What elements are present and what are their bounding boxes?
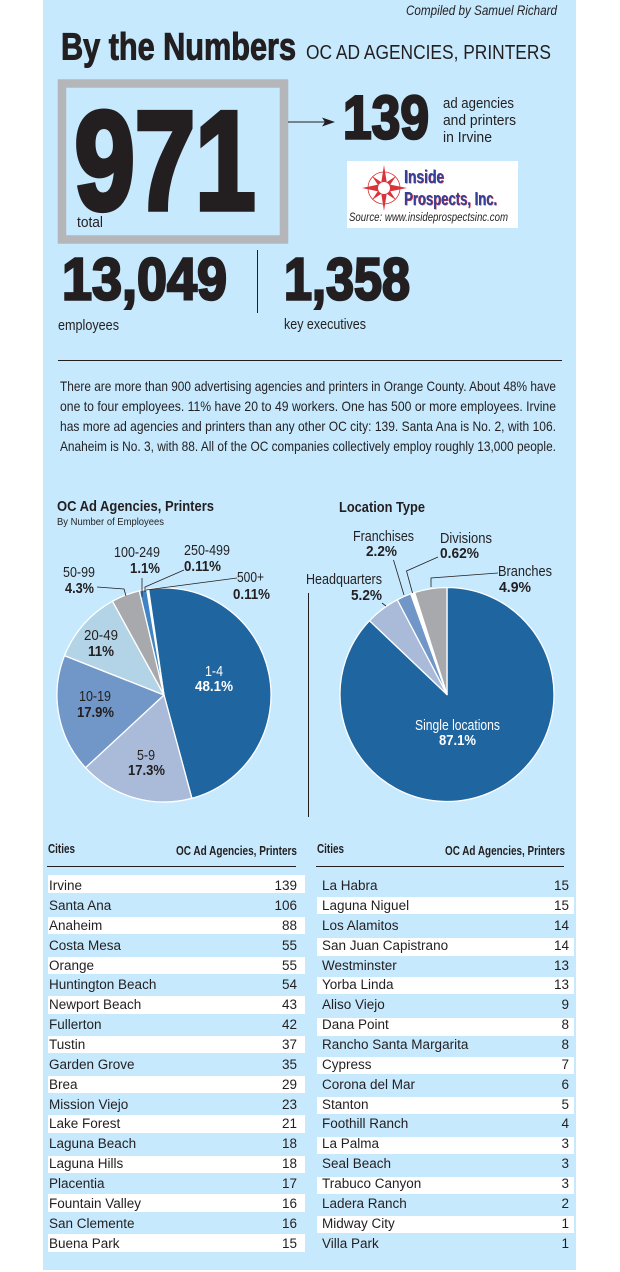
city rows: La Habra	[322, 878, 378, 893]
stat: 971 total: total	[77, 215, 103, 231]
stat: 1,358 key executives: key executives	[284, 317, 366, 333]
city rows: 17	[282, 1176, 297, 1191]
city rows: Westminster	[322, 958, 397, 973]
stat: 139 in Irvine	[343, 84, 516, 152]
city rows: Stanton	[322, 1097, 369, 1112]
stat: 971 total: 971	[74, 82, 256, 239]
slice label: divisions: 0.62%	[440, 546, 479, 562]
city rows: Laguna Hills	[49, 1156, 124, 1171]
city rows: Placentia	[49, 1176, 105, 1191]
city rows: 3	[561, 1136, 569, 1151]
slice label: 20-49: 11%	[88, 644, 114, 660]
city rows: 18	[282, 1136, 297, 1151]
slice label: headquarters: Headquarters	[306, 572, 382, 588]
city rows: 23	[282, 1097, 297, 1112]
city rows: 4	[561, 1116, 569, 1131]
city rows: 14	[554, 918, 569, 933]
slice label: 50-99: 50-99	[63, 565, 95, 581]
city rows: Tustin	[49, 1037, 85, 1052]
slice label: 20-49: 20-49	[84, 628, 118, 644]
slice label: divisions	[440, 531, 492, 562]
city rows: 8	[561, 1017, 569, 1032]
slice label: 250-499: 250-499	[184, 543, 230, 559]
stat: 139 in Irvine: in Irvine	[443, 130, 492, 146]
slice label: 1-4	[195, 664, 233, 695]
city rows	[49, 878, 297, 1251]
city rows: 15	[554, 898, 569, 913]
title: By the Numbers	[61, 26, 296, 68]
pie chart heading: employees: By Number of Employees	[57, 517, 164, 528]
city rows: Trabuco Canyon	[322, 1176, 421, 1191]
city rows: Ladera Ranch	[322, 1196, 407, 1211]
city rows: Aliso Viejo	[322, 997, 385, 1012]
slice label: 1-4: 1-4	[205, 664, 223, 680]
logo: Inside Prospects	[347, 161, 518, 228]
city rows: Irvine	[49, 878, 82, 893]
white row stripes	[317, 897, 574, 1233]
slice label: 5-9	[128, 748, 165, 779]
city rows: 6	[561, 1077, 569, 1092]
city rows: Santa Ana	[49, 898, 112, 913]
pie chart heading: employees	[57, 498, 214, 528]
city rows: 21	[282, 1116, 297, 1131]
city rows: Laguna Niguel	[322, 898, 409, 913]
slice label: 5-9: 5-9	[137, 748, 155, 764]
stat: 139 in Irvine: ad agencies	[443, 96, 514, 112]
city rows: 42	[282, 1017, 297, 1032]
city rows: Dana Point	[322, 1017, 389, 1032]
logo: Inside Prospects: Inside	[404, 166, 444, 187]
table header: OC Ad Agencies, Printers	[445, 844, 565, 858]
city rows: Lake Forest	[49, 1116, 121, 1131]
city rows: 8	[561, 1037, 569, 1052]
icon: compass rose	[362, 165, 407, 211]
table header: Cities	[317, 842, 344, 856]
city rows: Buena Park	[49, 1236, 120, 1251]
city rows: 43	[282, 997, 297, 1012]
leader lines	[382, 557, 498, 606]
stat: 13,049 employees	[58, 246, 227, 334]
slice label: 100-249	[114, 545, 160, 577]
slice label: branches	[498, 564, 552, 596]
city rows: 88	[282, 918, 297, 933]
city rows: Anaheim	[49, 918, 102, 933]
slice label: 10-19: 17.9%	[77, 705, 114, 721]
city rows: 5	[561, 1097, 569, 1112]
table header	[316, 842, 565, 866]
city rows: Huntington Beach	[49, 977, 156, 992]
logo: Inside Prospects: Prospects, Inc.	[404, 188, 497, 209]
city rows: Laguna Beach	[49, 1136, 136, 1151]
slice label: divisions: Divisions	[440, 531, 492, 547]
slice label: 500+: 0.11%	[233, 587, 270, 603]
city rows: Mission Viejo	[49, 1097, 128, 1112]
city rows: 3	[561, 1156, 569, 1171]
city rows: 7	[561, 1057, 569, 1072]
city rows: Yorba Linda	[322, 977, 394, 992]
slice label: 250-499	[184, 543, 230, 575]
subtitle: OC AD AGENCIES, PRINTERS	[306, 42, 551, 64]
city rows: La Palma	[322, 1136, 380, 1151]
city rows: Los Alamitos	[322, 918, 399, 933]
city rows: 55	[282, 958, 297, 973]
slice label: branches: Branches	[498, 564, 552, 580]
slice label: 10-19	[77, 689, 114, 721]
city rows: San Juan Capistrano	[322, 938, 448, 953]
city rows: Fountain Valley	[49, 1196, 141, 1211]
pie chart: location type	[306, 529, 554, 802]
pie chart: by number of employees	[57, 543, 271, 802]
summary paragraph: one to four employees. 11% have 20 to 49 workers. One has 500 or more employees. Irvine	[60, 398, 556, 414]
city rows: 2	[561, 1196, 569, 1211]
stat: 139 in Irvine: and printers	[443, 113, 516, 129]
summary paragraph	[60, 378, 556, 454]
pie chart heading: employees: OC Ad Agencies, Printers	[57, 498, 214, 515]
city rows: Garden Grove	[49, 1057, 135, 1072]
city rows: Foothill Ranch	[322, 1116, 408, 1131]
slice label: single locations: 87.1%	[439, 733, 476, 749]
slice label: 50-99: 4.3%	[65, 581, 94, 597]
slice label: 10-19: 10-19	[79, 689, 111, 705]
stat: 139 in Irvine: 139	[343, 84, 429, 152]
city rows: Midway City	[322, 1216, 395, 1231]
table: cities, right column	[316, 842, 574, 1251]
city rows: 15	[554, 878, 569, 893]
city rows: 54	[282, 977, 297, 992]
slice label: 50-99	[63, 565, 95, 597]
city rows: 139	[274, 878, 297, 893]
white row stripes	[48, 875, 305, 1252]
city rows: Seal Beach	[322, 1156, 391, 1171]
slice label: 100-249: 1.1%	[130, 561, 160, 577]
city rows: 3	[561, 1176, 569, 1191]
slice label: franchises: 2.2%	[366, 544, 397, 560]
slice label: 500+	[233, 570, 270, 603]
city rows: 37	[282, 1037, 297, 1052]
city rows: Rancho Santa Margarita	[322, 1037, 469, 1052]
city rows: 14	[554, 938, 569, 953]
city rows: 13	[554, 958, 569, 973]
stat: 13,049 employees: employees	[58, 318, 119, 334]
city rows: 29	[282, 1077, 297, 1092]
logo: Inside Prospects: Source: www.insideprospectsinc.com	[349, 210, 508, 224]
slice label: 5-9: 17.3%	[128, 763, 165, 779]
table header	[47, 842, 297, 866]
city rows: Corona del Mar	[322, 1077, 416, 1092]
city rows: Newport Beach	[49, 997, 141, 1012]
city rows: San Clemente	[49, 1216, 135, 1231]
slice label: franchises	[353, 529, 414, 560]
city rows: Fullerton	[49, 1017, 102, 1032]
stat: 1,358 key executives	[284, 246, 410, 333]
table header: Cities	[48, 842, 75, 856]
slice label: headquarters: 5.2%	[351, 588, 382, 604]
city rows: Cypress	[322, 1057, 372, 1072]
slice label: 100-249: 100-249	[114, 545, 160, 561]
arrow to Irvine	[288, 118, 335, 126]
slice label: 500+: 500+	[237, 570, 264, 586]
city rows	[322, 878, 569, 1251]
city rows: 9	[561, 997, 569, 1012]
slice label: branches: 4.9%	[499, 580, 531, 596]
slice label: 1-4: 48.1%	[195, 679, 233, 695]
city rows: 15	[282, 1236, 297, 1251]
city rows: Brea	[49, 1077, 78, 1092]
stat: 13,049 employees: 13,049	[62, 246, 227, 312]
city rows: 35	[282, 1057, 297, 1072]
table: cities, left column	[47, 842, 305, 1252]
city rows: 18	[282, 1156, 297, 1171]
city rows: 55	[282, 938, 297, 953]
slice label: 250-499: 0.11%	[184, 559, 221, 575]
logo: Inside Prospects: Inside	[405, 167, 445, 188]
pie chart heading: location type: Location Type	[339, 499, 425, 516]
slice label: single locations	[415, 718, 500, 749]
byline: Compiled by Samuel Richard	[406, 3, 557, 18]
city rows: Villa Park	[322, 1236, 379, 1251]
stat: 1,358 key executives: 1,358	[284, 246, 410, 312]
slice label: franchises: Franchises	[353, 529, 414, 545]
slice label: headquarters	[306, 572, 382, 604]
city rows: 16	[282, 1216, 297, 1231]
city rows: 106	[274, 898, 297, 913]
leader lines	[97, 570, 237, 597]
city rows: 1	[561, 1216, 569, 1231]
city rows: 1	[561, 1236, 569, 1251]
table header: OC Ad Agencies, Printers	[176, 844, 297, 858]
logo: Inside Prospects: Prospects, Inc.	[405, 189, 498, 210]
city rows: Costa Mesa	[49, 938, 122, 953]
slice label: single locations: Single locations	[415, 718, 500, 734]
city rows: 16	[282, 1196, 297, 1211]
city rows: Orange	[49, 958, 94, 973]
city rows: 13	[554, 977, 569, 992]
slice label: 20-49	[84, 628, 118, 660]
